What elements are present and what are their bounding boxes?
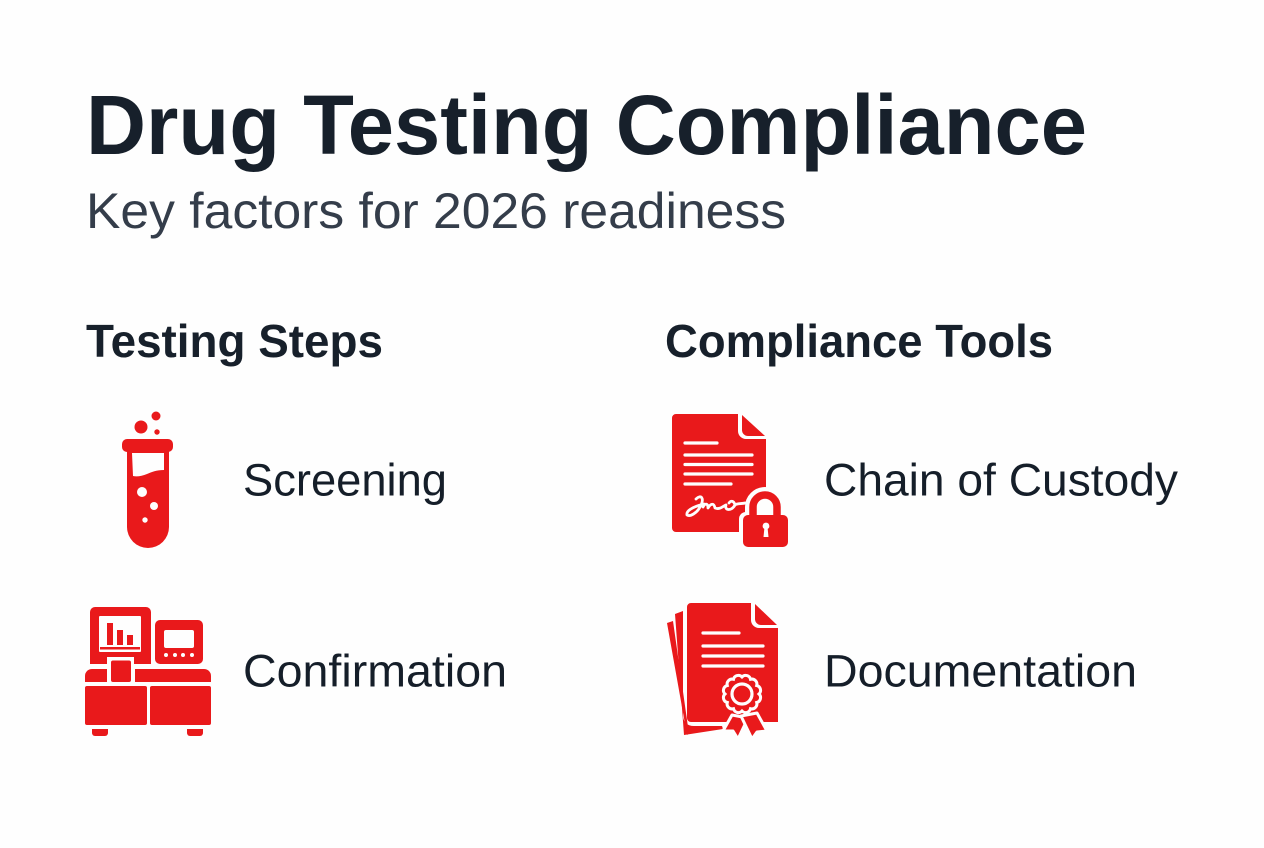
item: screening <box>122 412 447 548</box>
label: documentation: Documentation <box>824 646 1137 696</box>
icon: lab analyzer machine <box>85 607 211 736</box>
icon: test tube <box>122 412 173 548</box>
panel: testing steps <box>85 315 507 736</box>
item: confirmation <box>85 607 507 736</box>
title: Drug Testing Compliance <box>86 78 1087 172</box>
item: documentation <box>667 603 1137 739</box>
panel: compliance tools <box>665 315 1178 739</box>
label: chain of custody: Chain of Custody <box>824 454 1178 506</box>
subtitle: Key factors for 2026 readiness <box>86 183 786 239</box>
icon: signed document with padlock <box>672 414 791 550</box>
heading: compliance tools: Compliance Tools <box>665 315 1053 367</box>
item: chain of custody <box>672 414 1178 550</box>
icon: certified document stack <box>667 603 778 739</box>
heading: testing steps: Testing Steps <box>86 315 383 367</box>
label: screening: Screening <box>243 454 447 506</box>
label: confirmation: Confirmation <box>243 646 507 696</box>
